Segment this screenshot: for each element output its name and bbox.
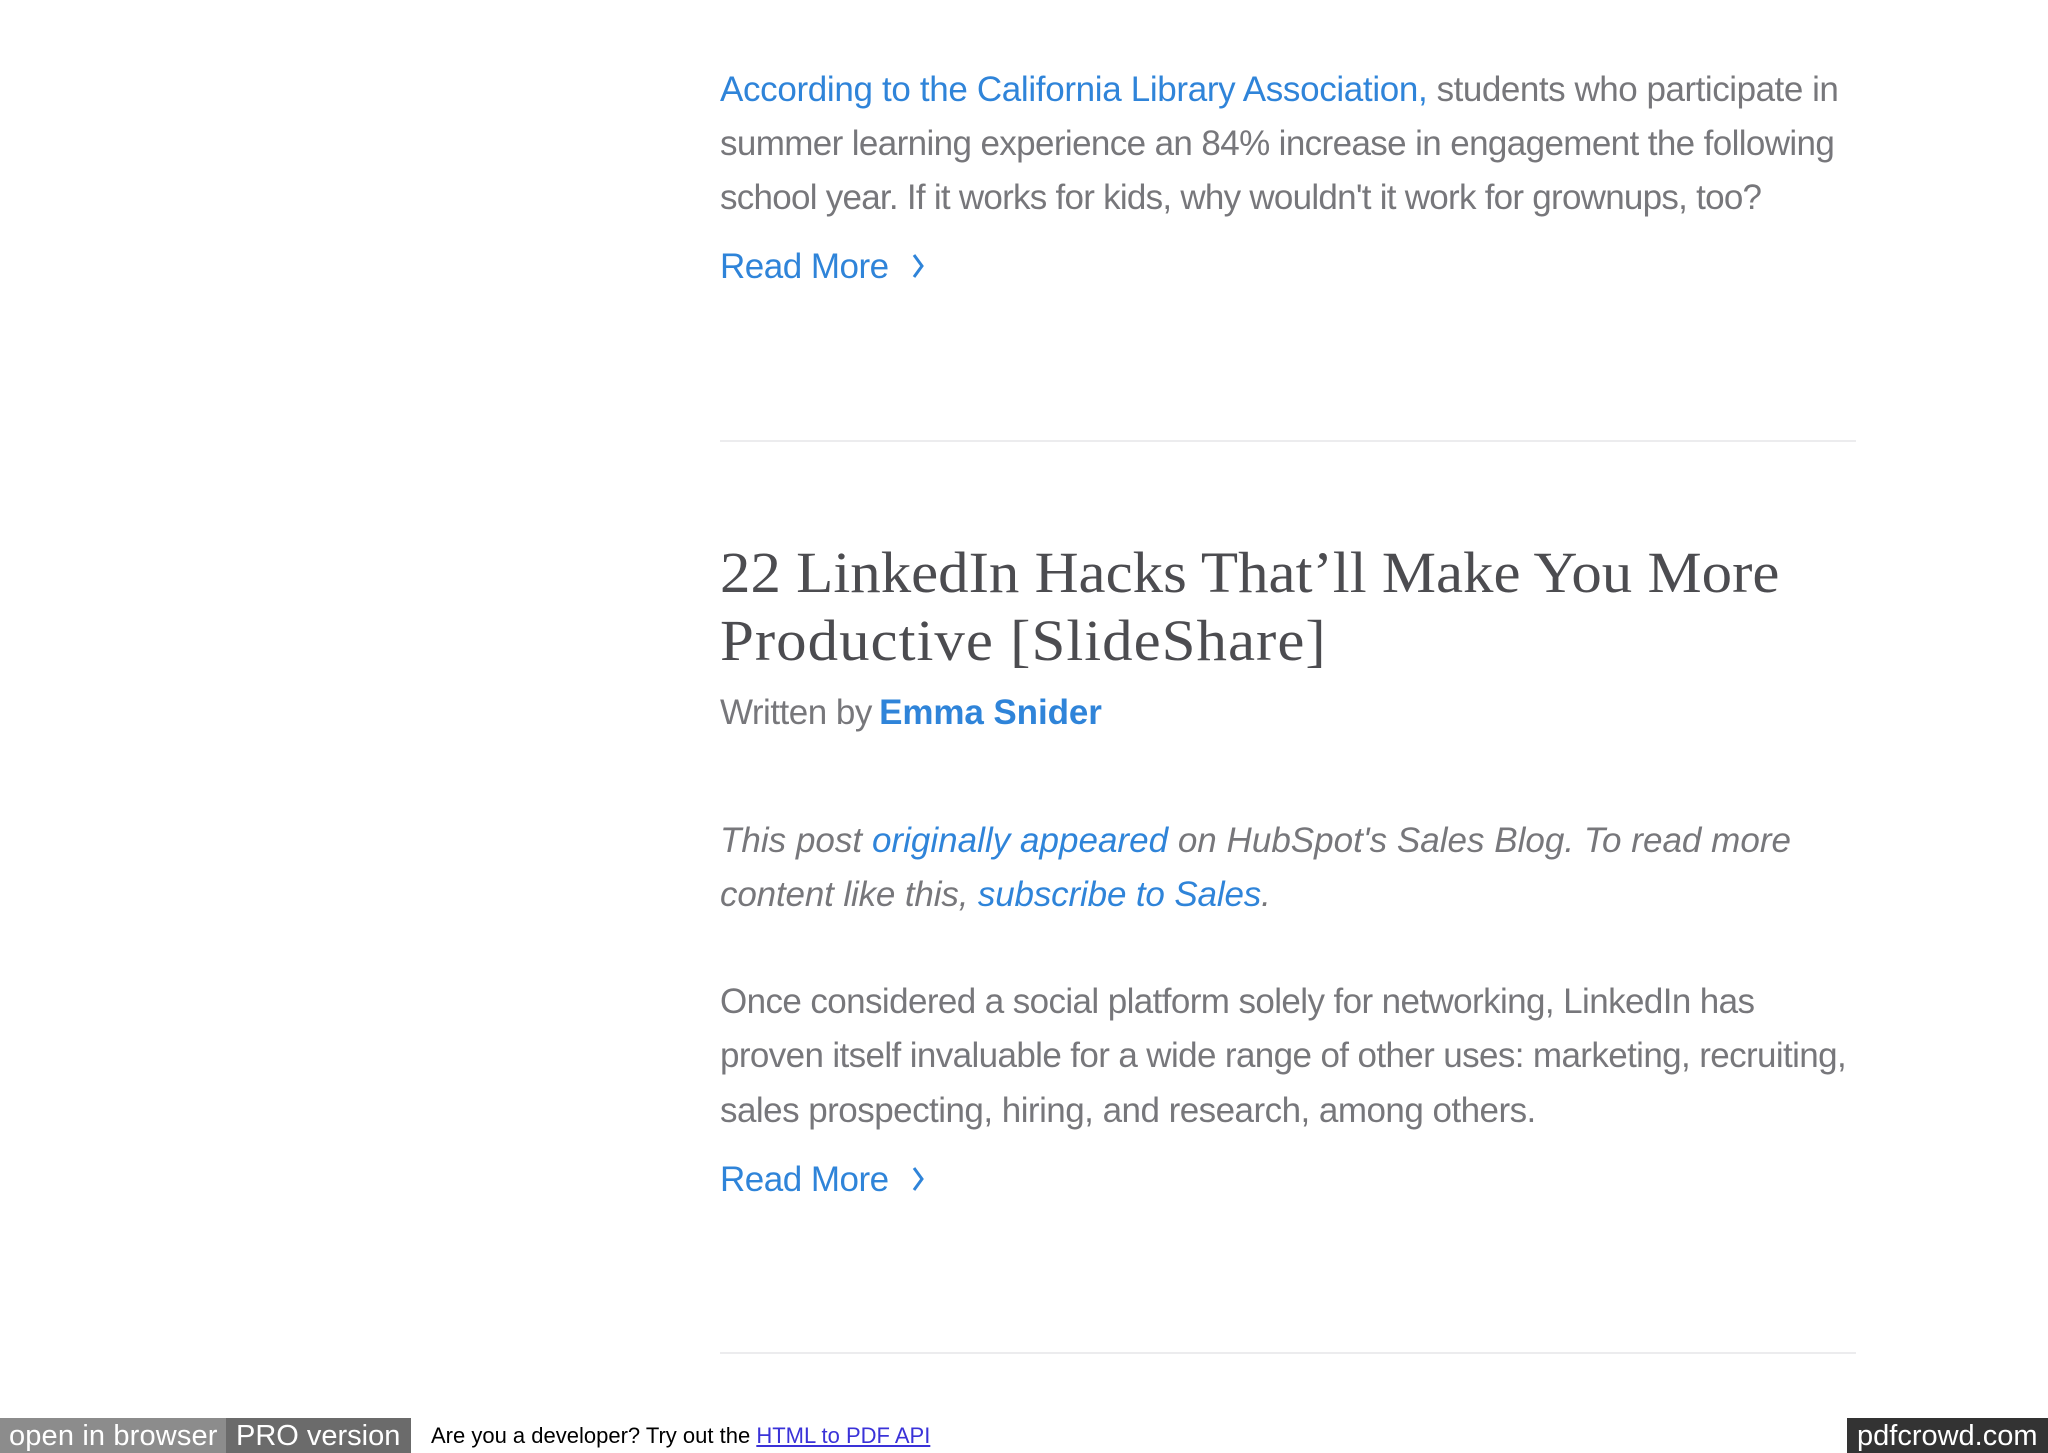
intro line 1: This post originally appeared on HubSpot's Sales Blog. To read more — [720, 821, 1791, 860]
divider — [720, 1352, 1856, 1354]
footer: open in browser button: open in browser — [9, 1420, 218, 1452]
excerpt line 2: proven itself invaluable for a wide range of other uses: marketing, recruiting, — [720, 1036, 1846, 1075]
read more link 1: Read More — [720, 247, 889, 286]
title line 2: Productive [SlideShare] — [720, 608, 1327, 673]
footer: pro version button: PRO version — [236, 1420, 400, 1452]
icon: chevron 1 — [912, 254, 924, 278]
byline: Written by Emma Snider — [720, 693, 1102, 732]
excerpt line 3: school year. If it works for kids, why wouldn't it work for grownups, too? — [720, 178, 1761, 217]
divider — [720, 440, 1856, 442]
article 2 excerpt — [720, 982, 1846, 1130]
intro line 2: content like this, subscribe to Sales. — [720, 875, 1271, 914]
article 1 excerpt — [720, 70, 1838, 217]
read more link 2: Read More — [720, 1160, 889, 1199]
footer: pdfcrowd badge: pdfcrowd.com — [1857, 1420, 2038, 1452]
icon: chevron 2 — [912, 1167, 924, 1191]
title line 1: 22 LinkedIn Hacks That’ll Make You More — [720, 540, 1779, 605]
excerpt line 1: According to the California Library Association, students who participate in — [720, 70, 1838, 109]
footer: developer note: Are you a developer? Try out the HTML to PDF API — [431, 1423, 930, 1448]
excerpt line 3: sales prospecting, hiring, and research, among others. — [720, 1091, 1536, 1130]
excerpt line 1: Once considered a social platform solely for networking, LinkedIn has — [720, 982, 1754, 1021]
italic intro — [720, 821, 1791, 914]
excerpt line 2: summer learning experience an 84% increase in engagement the following — [720, 124, 1834, 163]
article 2 title — [720, 540, 1779, 673]
